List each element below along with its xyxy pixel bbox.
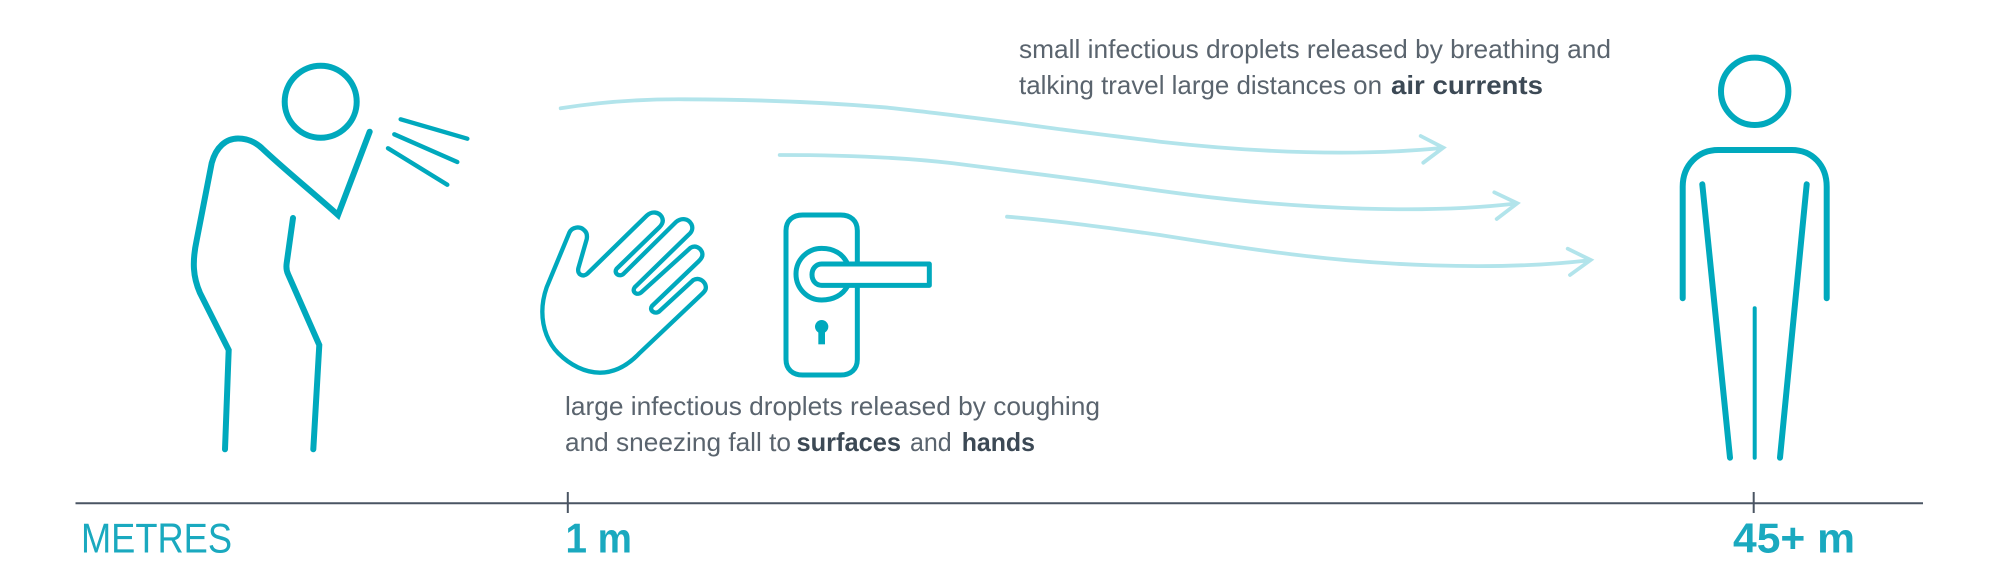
lever — [812, 264, 929, 285]
caption line 2: and sneezing fall to — [565, 427, 791, 457]
door plate — [786, 215, 857, 375]
axis title: METRES — [81, 515, 232, 562]
icon: door handle — [786, 215, 929, 375]
emphasis: hands: hands — [962, 427, 1035, 457]
air current arrow 2 — [780, 155, 1517, 219]
emphasis: surfaces: surfaces — [796, 427, 901, 457]
caption line 1: small infectious droplets released by breathing and — [1019, 34, 1611, 64]
caption: small droplets — [1019, 34, 1611, 100]
tick: 45+ m — [1753, 492, 1755, 513]
cough spray lines — [388, 119, 467, 185]
tick: 1 m — [567, 492, 569, 513]
head — [1721, 58, 1788, 125]
axis label: 1 m: 1 m — [566, 515, 632, 562]
air current arrow 3 — [1007, 217, 1591, 275]
distance axis — [76, 492, 1923, 513]
head — [285, 66, 357, 138]
caption line 2: talking travel large distances on — [1019, 70, 1382, 100]
air current arrow 1 — [561, 99, 1443, 163]
centre leg line — [1753, 308, 1757, 458]
caption line 1: large infectious droplets released by coughing — [565, 391, 1100, 421]
back and raised arm — [194, 132, 370, 449]
shoulders and arms — [1683, 150, 1827, 298]
axis label: 45+ m: 45+ m — [1733, 515, 1855, 562]
right body line — [1780, 184, 1807, 458]
left body line — [1702, 184, 1730, 458]
caption: large droplets — [565, 391, 1100, 457]
knob rose — [796, 248, 848, 300]
connecting word: and — [910, 427, 952, 457]
emphasis: air currents: air currents — [1391, 70, 1543, 100]
figure: coughing person — [194, 66, 467, 449]
front leg — [286, 218, 319, 449]
keyhole — [815, 320, 828, 344]
icon: hand — [542, 212, 706, 373]
figure: standing person — [1683, 58, 1827, 458]
